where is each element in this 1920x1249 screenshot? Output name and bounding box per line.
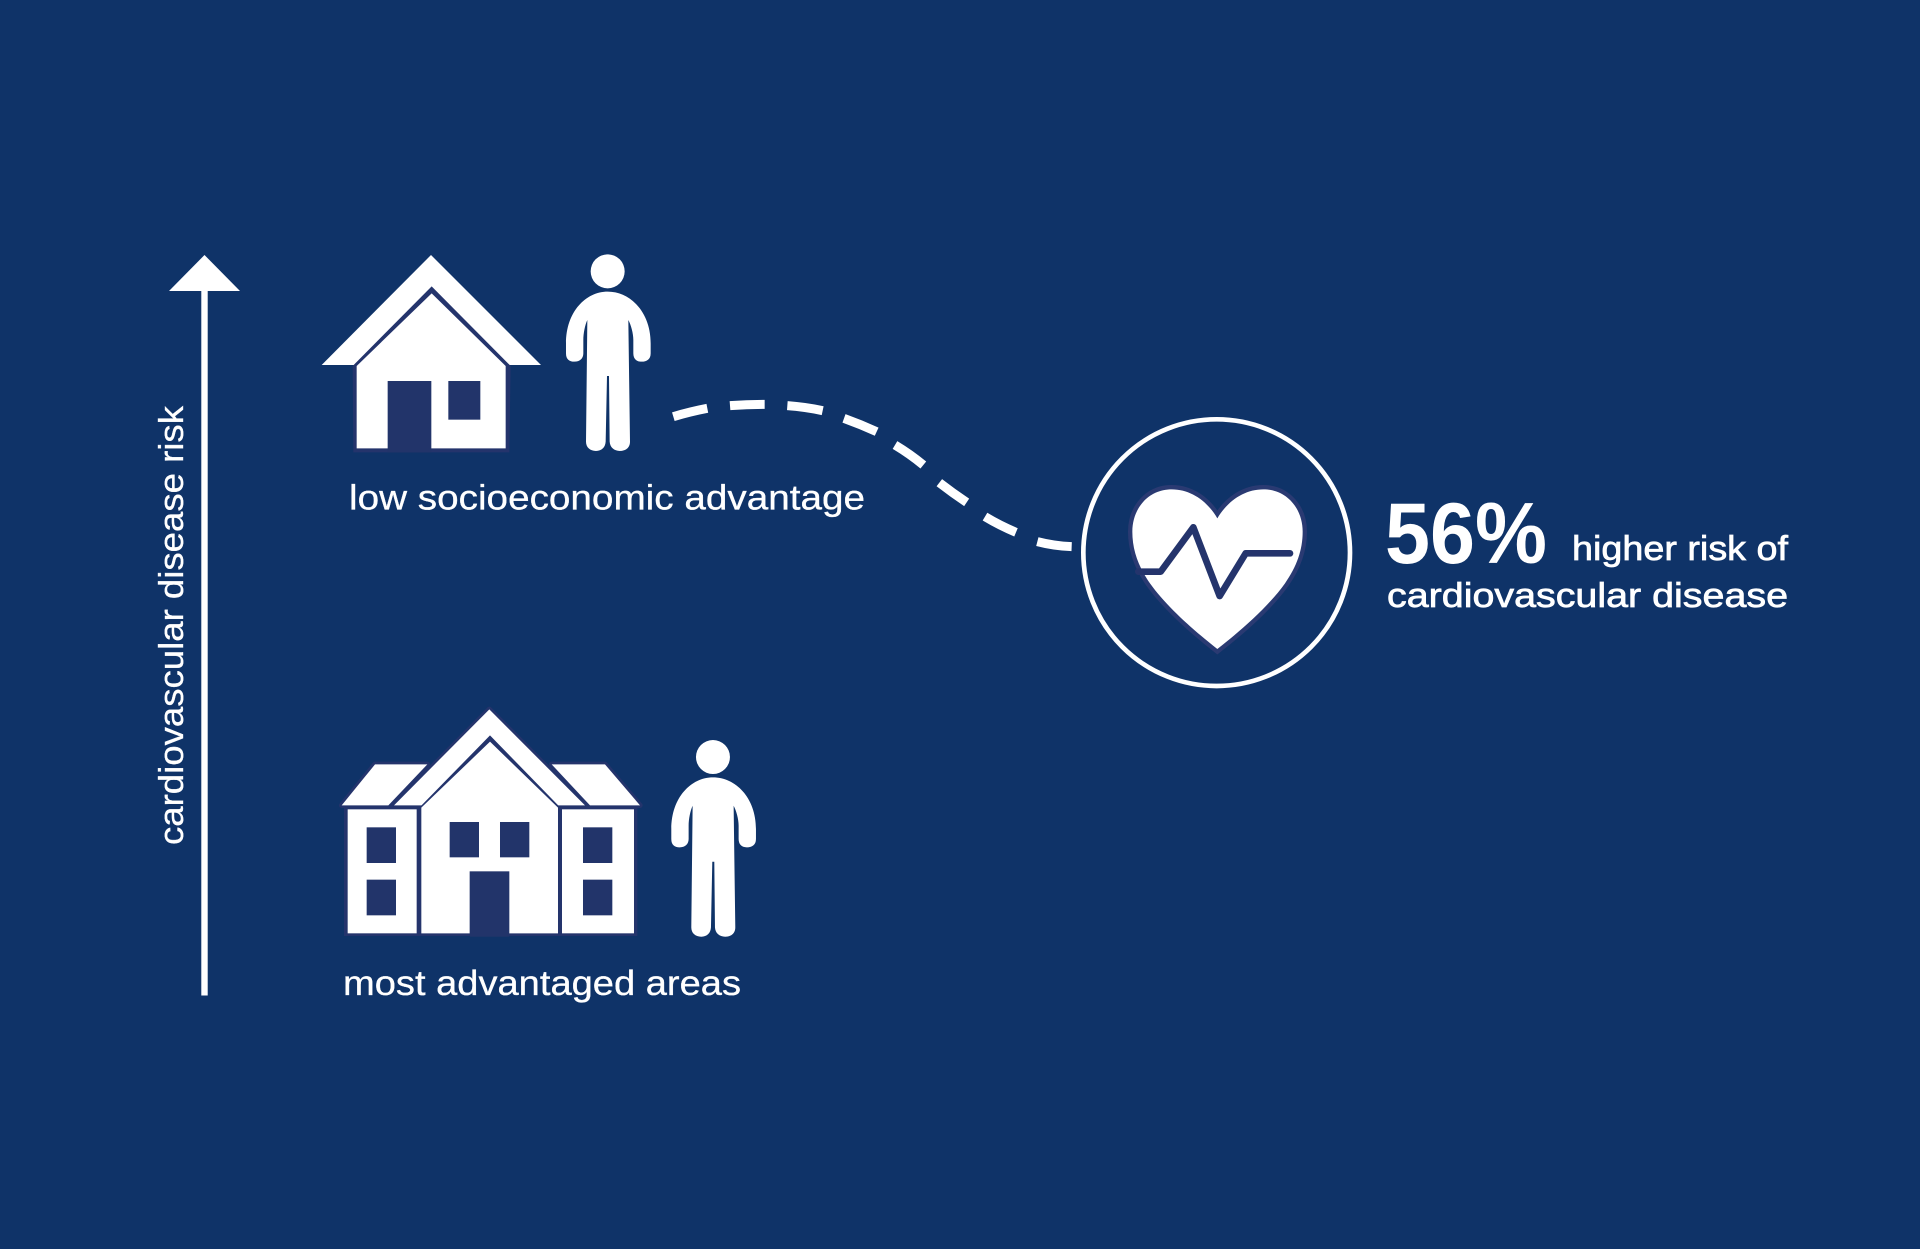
statistic caption: cardiovascular disease bbox=[1387, 577, 1788, 615]
statistic caption bbox=[1387, 530, 1789, 615]
dashed connector from person to heart bbox=[673, 404, 1072, 547]
label: most advantaged areas: most advantaged areas bbox=[343, 964, 741, 1003]
statistic: 56%: 56% bbox=[1385, 486, 1547, 582]
arrow: rising cardiovascular risk bbox=[169, 255, 240, 996]
icon: person, low advantage bbox=[566, 254, 651, 451]
axis label: cardiovascular disease risk bbox=[153, 405, 191, 845]
statistic caption: higher risk of bbox=[1572, 530, 1789, 568]
icon: large house bbox=[342, 709, 640, 937]
icon: heart with pulse in circle bbox=[1083, 419, 1350, 686]
label: low socioeconomic advantage: low socioeconomic advantage bbox=[349, 478, 865, 518]
icon: small house bbox=[322, 255, 541, 452]
icon: person, most advantaged bbox=[671, 740, 756, 937]
